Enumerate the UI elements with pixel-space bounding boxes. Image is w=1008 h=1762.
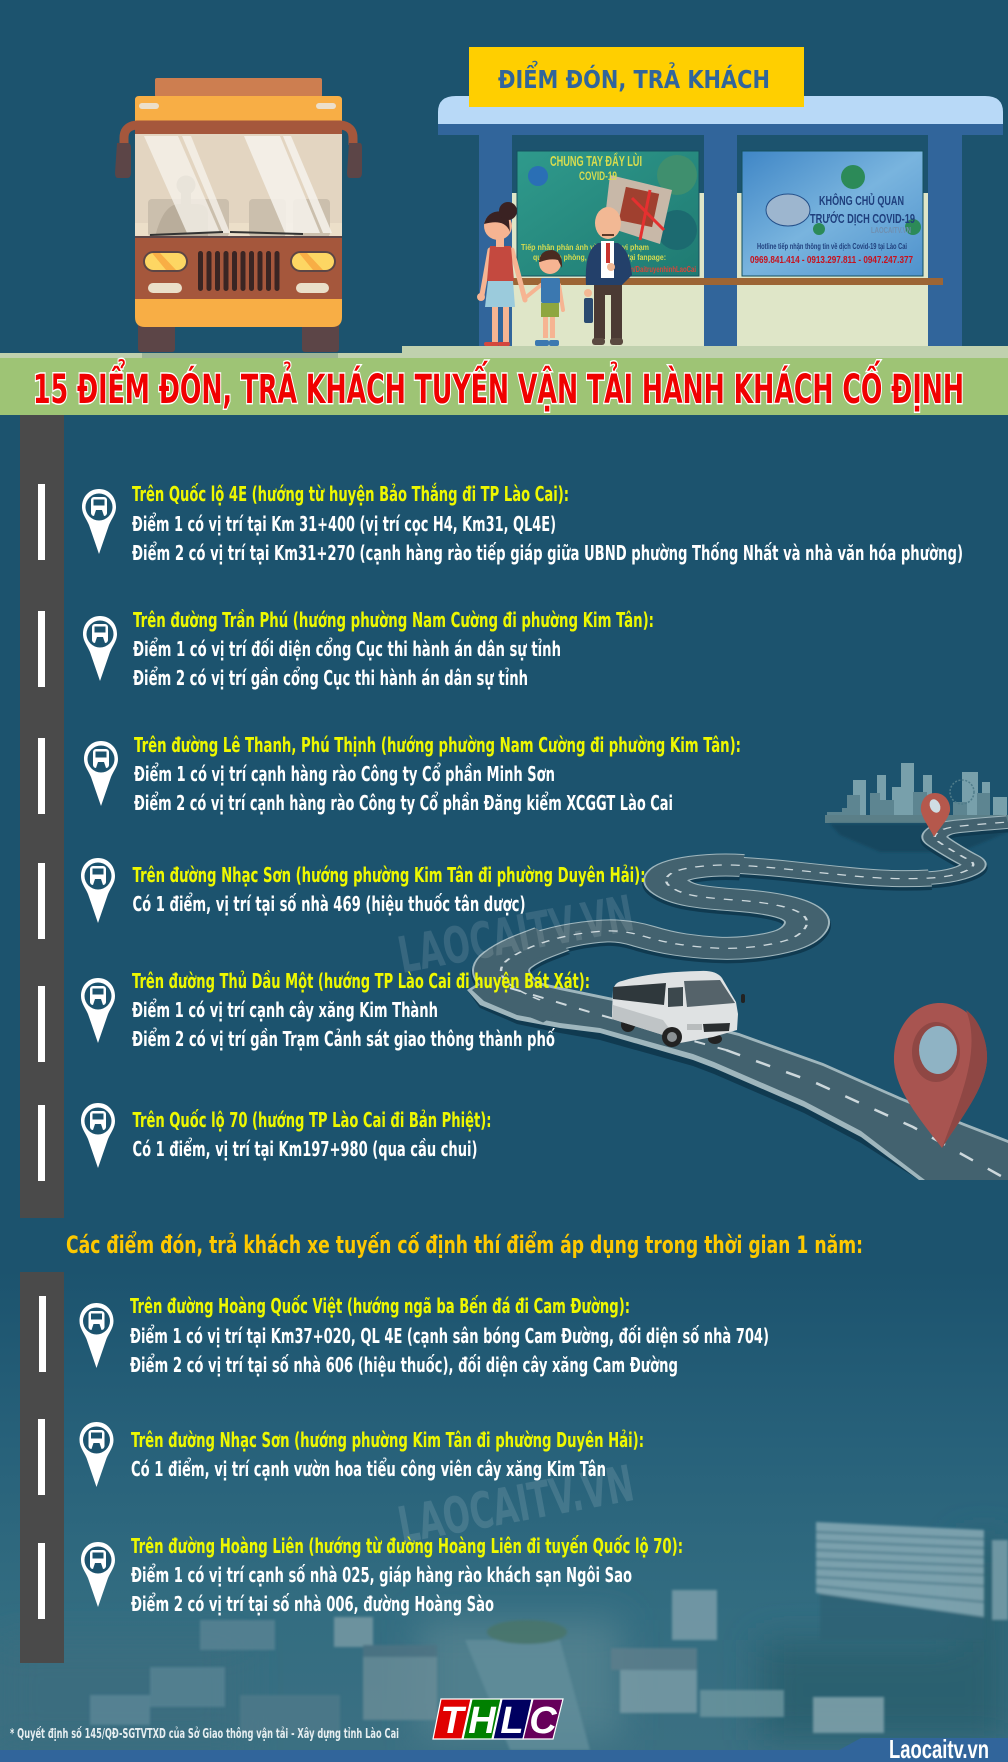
text block: Thủ Dầu Một: Trên đường Thủ Dầu Một (hướng TP Lào Cai đi huyện Bát Xát):: [132, 969, 590, 993]
text block: Lê Thanh, Phú Thịnh: Điểm 1 có vị trí cạnh hàng rào Công ty Cổ phần Minh Sơn: [134, 762, 555, 786]
illustration: minibus: [612, 971, 745, 1047]
text block: Hoàng Quốc Việt: Điểm 2 có vị trí tại số nhà 606 (hiệu thuốc), đối diện cây xăng Cam Đường: [130, 1353, 678, 1377]
sign: pick-up point: ĐIỂM ĐÓN, TRẢ KHÁCH: [498, 60, 770, 94]
icon: small map pin: [921, 793, 950, 837]
icon: large map pin: [894, 1003, 987, 1148]
icon: bus stop pin 6: [81, 1103, 115, 1168]
logo: THLC: C: [529, 1700, 557, 1742]
text block: Quốc lộ 4E: [132, 482, 963, 565]
text block: Quốc lộ 70: [132, 1108, 492, 1161]
icon: bus stop pin 1: [82, 489, 116, 554]
text block: Thủ Dầu Một: [132, 969, 590, 1051]
text block: Hoàng Liên: Điểm 1 có vị trí cạnh số nhà 025, giáp hàng rào khách sạn Ngôi Sao: [131, 1563, 632, 1587]
poster: community covid: .com/DaitruyenhinhLaoCai: [620, 265, 696, 274]
watermark: LAOCAITV.VN: [394, 1454, 638, 1555]
watermark: LAOCAITV.VN: [394, 884, 638, 985]
text block: Nhạc Sơn: Có 1 điểm, vị trí tại số nhà 469 (hiệu thuốc tân dược): [132, 892, 526, 916]
text block: Nhạc Sơn trial: [131, 1428, 644, 1481]
text block: Thủ Dầu Một: Điểm 2 có vị trí gần Trạm Cảnh sát giao thông thành phố: [132, 1027, 555, 1051]
illustration: child: [525, 250, 563, 346]
icon: bus stop pin 5: [81, 978, 115, 1043]
icon: bus stop pin 3: [84, 741, 118, 806]
text block: Nhạc Sơn: Trên đường Nhạc Sơn (hướng phường Kim Tân đi phường Duyên Hải):: [132, 863, 646, 887]
poster: no complacency: 0969.841.414 - 0913.297.811 - 0947.247.377: [750, 255, 913, 266]
logo: THLC: [433, 1699, 563, 1742]
poster: community covid: COVID-19: [579, 169, 617, 183]
text block: Quốc lộ 70: Trên Quốc lộ 70 (hướng TP Lào Cai đi Bản Phiệt):: [132, 1108, 492, 1132]
illustration: city skyline: [825, 763, 1008, 852]
icon: bus stop pin 4: [81, 858, 115, 923]
footnote: * Quyết định số 145/QĐ-SGTVTXD của Sở Giao thông vận tải - Xây dựng tỉnh Lào Cai: [10, 1727, 399, 1742]
text block: Nhạc Sơn: [132, 863, 646, 916]
poster: community covid: CHUNG TAY ĐẨY LÙI: [550, 152, 642, 170]
text block: Nhạc Sơn trial: Có 1 điểm, vị trí cạnh vườn hoa tiểu công viên cây xăng Kim Tân: [131, 1457, 606, 1481]
panel: city photo background: [0, 1270, 1008, 1762]
illustration: man with briefcase: [584, 207, 632, 345]
footer bar: website: [0, 1734, 1008, 1762]
poster: no complacency: TRƯỚC DỊCH COVID-19: [810, 211, 915, 226]
icon: bus stop pin 2: [83, 616, 117, 681]
road column: main section: [20, 415, 64, 1218]
text block: Nhạc Sơn trial: Trên đường Nhạc Sơn (hướng phường Kim Tân đi phường Duyên Hải):: [131, 1428, 644, 1452]
poster: no complacency: Hotline tiếp nhận thông tin về dịch Covid-19 tại Lào Cai: [757, 242, 907, 251]
icon: bus stop pin 7: [80, 1303, 114, 1368]
logo: THLC: H: [468, 1700, 497, 1742]
text block: Lê Thanh, Phú Thịnh: [134, 733, 741, 815]
illustration: bus front: [115, 78, 362, 352]
text block: Hoàng Liên: [131, 1534, 683, 1616]
icon: bus stop pin 8: [80, 1422, 114, 1487]
illustration: pavement: [0, 346, 1008, 358]
poster: community covid: quy định phòng, chống dịch tại fanpage:: [533, 253, 666, 262]
text block: Thủ Dầu Một: Điểm 1 có vị trí cạnh cây xăng Kim Thành: [132, 998, 438, 1022]
text block: Lê Thanh, Phú Thịnh: Điểm 2 có vị trí cạnh hàng rào Công ty Cổ phần Đăng kiểm XCGGT Lào Cai: [134, 791, 673, 815]
text block: Quốc lộ 4E: Trên Quốc lộ 4E (hướng từ huyện Bảo Thắng đi TP Lào Cai):: [132, 482, 569, 506]
poster: community covid: Tiếp nhận phản ánh về cơ sở vi phạm: [521, 243, 649, 252]
logo: THLC: T: [440, 1700, 466, 1742]
text block: Hoàng Quốc Việt: Trên đường Hoàng Quốc Việt (hướng ngã ba Bến đá đi Cam Đường):: [130, 1294, 630, 1318]
text block: Hoàng Quốc Việt: [130, 1294, 769, 1377]
text block: Trần Phú: Điểm 1 có vị trí đối diện cổng Cục thi hành án dân sự tỉnh: [133, 637, 561, 661]
road column: trial section: [20, 1272, 64, 1663]
text block: Hoàng Liên: Trên đường Hoàng Liên (hướng từ đường Hoàng Liên đi tuyến Quốc lộ 70):: [131, 1534, 683, 1558]
poster: no complacency: KHÔNG CHỦ QUAN: [819, 193, 904, 208]
text block: Trần Phú: [133, 608, 654, 690]
icon: bus stop pin 9: [81, 1542, 115, 1607]
text block: Trần Phú: Điểm 2 có vị trí gần cổng Cục thi hành án dân sự tỉnh: [133, 666, 528, 690]
poster: no complacency: [742, 151, 923, 276]
illustration: bus shelter: [438, 96, 1003, 346]
sign: pick-up point: [469, 47, 804, 107]
illustration: woman: [477, 202, 525, 346]
poster: no complacency: LAOCAITV.VN: [871, 226, 911, 235]
illustration: winding road: [467, 822, 1008, 1180]
text block: Quốc lộ 70: Có 1 điểm, vị trí tại Km197+980 (qua cầu chui): [132, 1137, 478, 1161]
logo: THLC: L: [500, 1700, 524, 1742]
text block: Trần Phú: Trên đường Trần Phú (hướng phường Nam Cường đi phường Kim Tân):: [133, 608, 654, 632]
text block: Quốc lộ 4E: Điểm 1 có vị trí tại Km 31+400 (vị trí cọc H4, Km31, QL4E): [132, 512, 556, 536]
text block: Hoàng Liên: Điểm 2 có vị trí tại số nhà 006, đường Hoàng Sào: [131, 1592, 494, 1616]
poster: community covid: [517, 151, 699, 276]
